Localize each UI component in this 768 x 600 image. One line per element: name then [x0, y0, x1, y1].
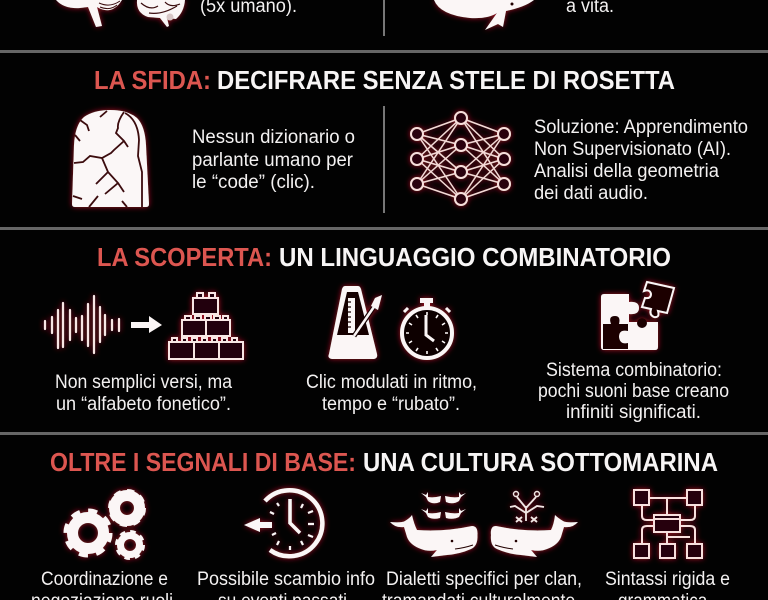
icon: cracked stele	[72, 110, 149, 207]
text: coordination: Coordinazione e	[41, 569, 168, 590]
text: dialects	[382, 569, 582, 600]
icon: neural network	[411, 112, 510, 205]
text: combinatorial system	[538, 360, 729, 423]
text: solution: dei dati audio.	[534, 183, 648, 204]
text: no dictionary: le “code” (clic).	[192, 172, 315, 193]
text: past events	[197, 569, 375, 600]
icon: building blocks	[169, 293, 243, 359]
text: coordination	[31, 569, 173, 600]
text: phonetic alphabet: un “alfabeto fonetico”.	[56, 394, 231, 415]
heading: oltre i segnali: UNA CULTURA SOTTOMARINA	[363, 447, 718, 477]
text: no dictionary	[192, 127, 355, 193]
text: solution: Analisi della geometria	[534, 161, 719, 182]
text: solution: Non Supervisionato (AI).	[534, 139, 731, 160]
heading: la sfida: DECIFRARE SENZA STELE DI ROSETTA	[217, 65, 675, 95]
panel: top section fragment	[56, 0, 614, 36]
text: past events: Possibile scambio info	[197, 569, 375, 590]
icon: sound wave	[45, 296, 119, 353]
text: phonetic alphabet	[55, 372, 232, 415]
icon: gears	[66, 491, 144, 558]
text: rhythm: Clic modulati in ritmo,	[306, 372, 477, 393]
text: combinatorial system: Sistema combinatorio:	[546, 360, 722, 381]
icon: whale with small whales	[390, 492, 478, 557]
panel: la sfida	[72, 65, 748, 213]
text: rhythm: tempo e “rubato”.	[322, 394, 460, 415]
text: combinatorial system: pochi suoni base creano	[538, 381, 729, 402]
icon: clock with back arrow	[244, 490, 322, 556]
heading: la scoperta: UN LINGUAGGIO COMBINATORIO	[279, 242, 671, 272]
text: no dictionary: parlante umano per	[192, 150, 354, 171]
heading: oltre i segnali	[50, 447, 718, 477]
text: phonetic alphabet: Non semplici versi, ma	[55, 372, 232, 393]
text: dialects: Dialetti specifici per clan,	[386, 569, 582, 590]
icon: whale body	[434, 0, 534, 30]
icon: metronome	[328, 286, 382, 359]
heading: la scoperta: LA SCOPERTA:	[97, 242, 272, 272]
panel: la scoperta	[45, 242, 729, 423]
icon: syntax diagram	[634, 490, 702, 558]
icon: arrow	[131, 316, 162, 333]
icon: whale with branching tree	[491, 492, 578, 557]
heading: la sfida: LA SFIDA:	[94, 65, 211, 95]
panel: oltre i segnali	[31, 447, 730, 600]
text: combinatorial system: infiniti significati.	[566, 402, 701, 423]
text: syntax: Sintassi rigida e	[605, 569, 730, 590]
text: syntax	[605, 569, 730, 600]
text: rhythm	[306, 372, 477, 415]
text: solution	[534, 117, 748, 204]
icon: stopwatch	[402, 298, 452, 358]
text: solution: Soluzione: Apprendimento	[534, 117, 748, 138]
heading: oltre i segnali: OLTRE I SEGNALI DI BASE:	[50, 447, 356, 477]
icon: puzzle	[601, 282, 674, 350]
icon: dolphin and human brains	[56, 0, 185, 27]
text: no dictionary: Nessun dizionario o	[192, 127, 355, 148]
heading: la scoperta	[97, 242, 671, 272]
